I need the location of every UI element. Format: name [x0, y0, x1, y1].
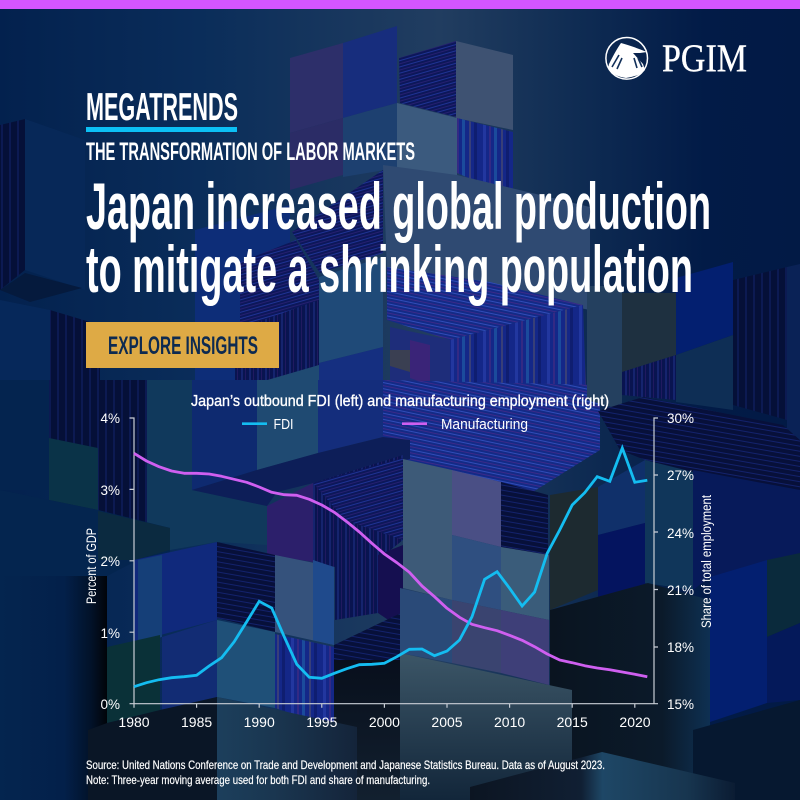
- x axis labels: 1990: [244, 714, 275, 730]
- right axis title: Share of total employment: [699, 495, 714, 628]
- legend: Manufacturing: [402, 417, 528, 433]
- right axis labels: [667, 411, 694, 712]
- right axis labels: 15%: [667, 697, 694, 712]
- line: FDI: [134, 448, 647, 687]
- x axis labels: 1985: [181, 714, 212, 730]
- accent underline: [86, 127, 237, 132]
- subtitle: THE TRANSFORMATION OF LABOR MARKETS: [86, 138, 415, 166]
- source note: Source: United Nations Conference on Trade and Development and Japanese Statistics Bureau. Data as of August 2023.: [86, 758, 605, 772]
- legend: Manufacturing: Manufacturing: [441, 417, 528, 433]
- x axis labels: 2000: [369, 714, 400, 730]
- source note: [86, 758, 605, 787]
- x axis labels: 1995: [306, 714, 338, 730]
- PGIM logo: [606, 37, 747, 80]
- PGIM wordmark: PGIM: [662, 37, 747, 80]
- line chart: [84, 411, 714, 730]
- legend: [242, 417, 528, 433]
- x axis labels: 2010: [494, 714, 525, 730]
- right axis labels: 24%: [667, 526, 694, 541]
- right axis labels: 30%: [667, 411, 694, 426]
- top accent bar: [0, 0, 800, 9]
- right axis labels: 27%: [667, 468, 694, 483]
- chart title: Japan’s outbound FDI (left) and manufacturing employment (right): [191, 393, 609, 410]
- x axis labels: [118, 714, 651, 730]
- x axis labels: 2015: [557, 714, 588, 730]
- line: manufacturing: [134, 453, 647, 677]
- left axis labels: 2%: [100, 554, 120, 569]
- left axis labels: [100, 411, 120, 712]
- left axis labels: 4%: [100, 411, 120, 426]
- right axis labels: 21%: [667, 583, 694, 598]
- headline: [86, 169, 711, 306]
- axes: [130, 418, 658, 708]
- x axis labels: 1980: [118, 714, 150, 730]
- left axis title: Percent of GDP: [84, 528, 99, 604]
- button: explore insights: EXPLORE INSIGHTS: [108, 332, 258, 360]
- x axis labels: 2005: [431, 714, 463, 730]
- legend: FDI: [242, 417, 294, 433]
- left axis labels: 0%: [100, 697, 120, 712]
- right axis labels: 18%: [667, 640, 694, 655]
- source note: Note: Three-year moving average used for both FDI and share of manufacturing.: [86, 773, 430, 787]
- button: explore insights: [86, 322, 279, 368]
- eyebrow: MEGATRENDS: MEGATRENDS: [86, 86, 238, 129]
- left axis labels: 3%: [100, 483, 120, 498]
- icon: rock emblem: [606, 38, 648, 79]
- legend: FDI: FDI: [274, 417, 294, 433]
- x axis labels: 2020: [619, 714, 651, 730]
- left axis labels: 1%: [100, 626, 120, 641]
